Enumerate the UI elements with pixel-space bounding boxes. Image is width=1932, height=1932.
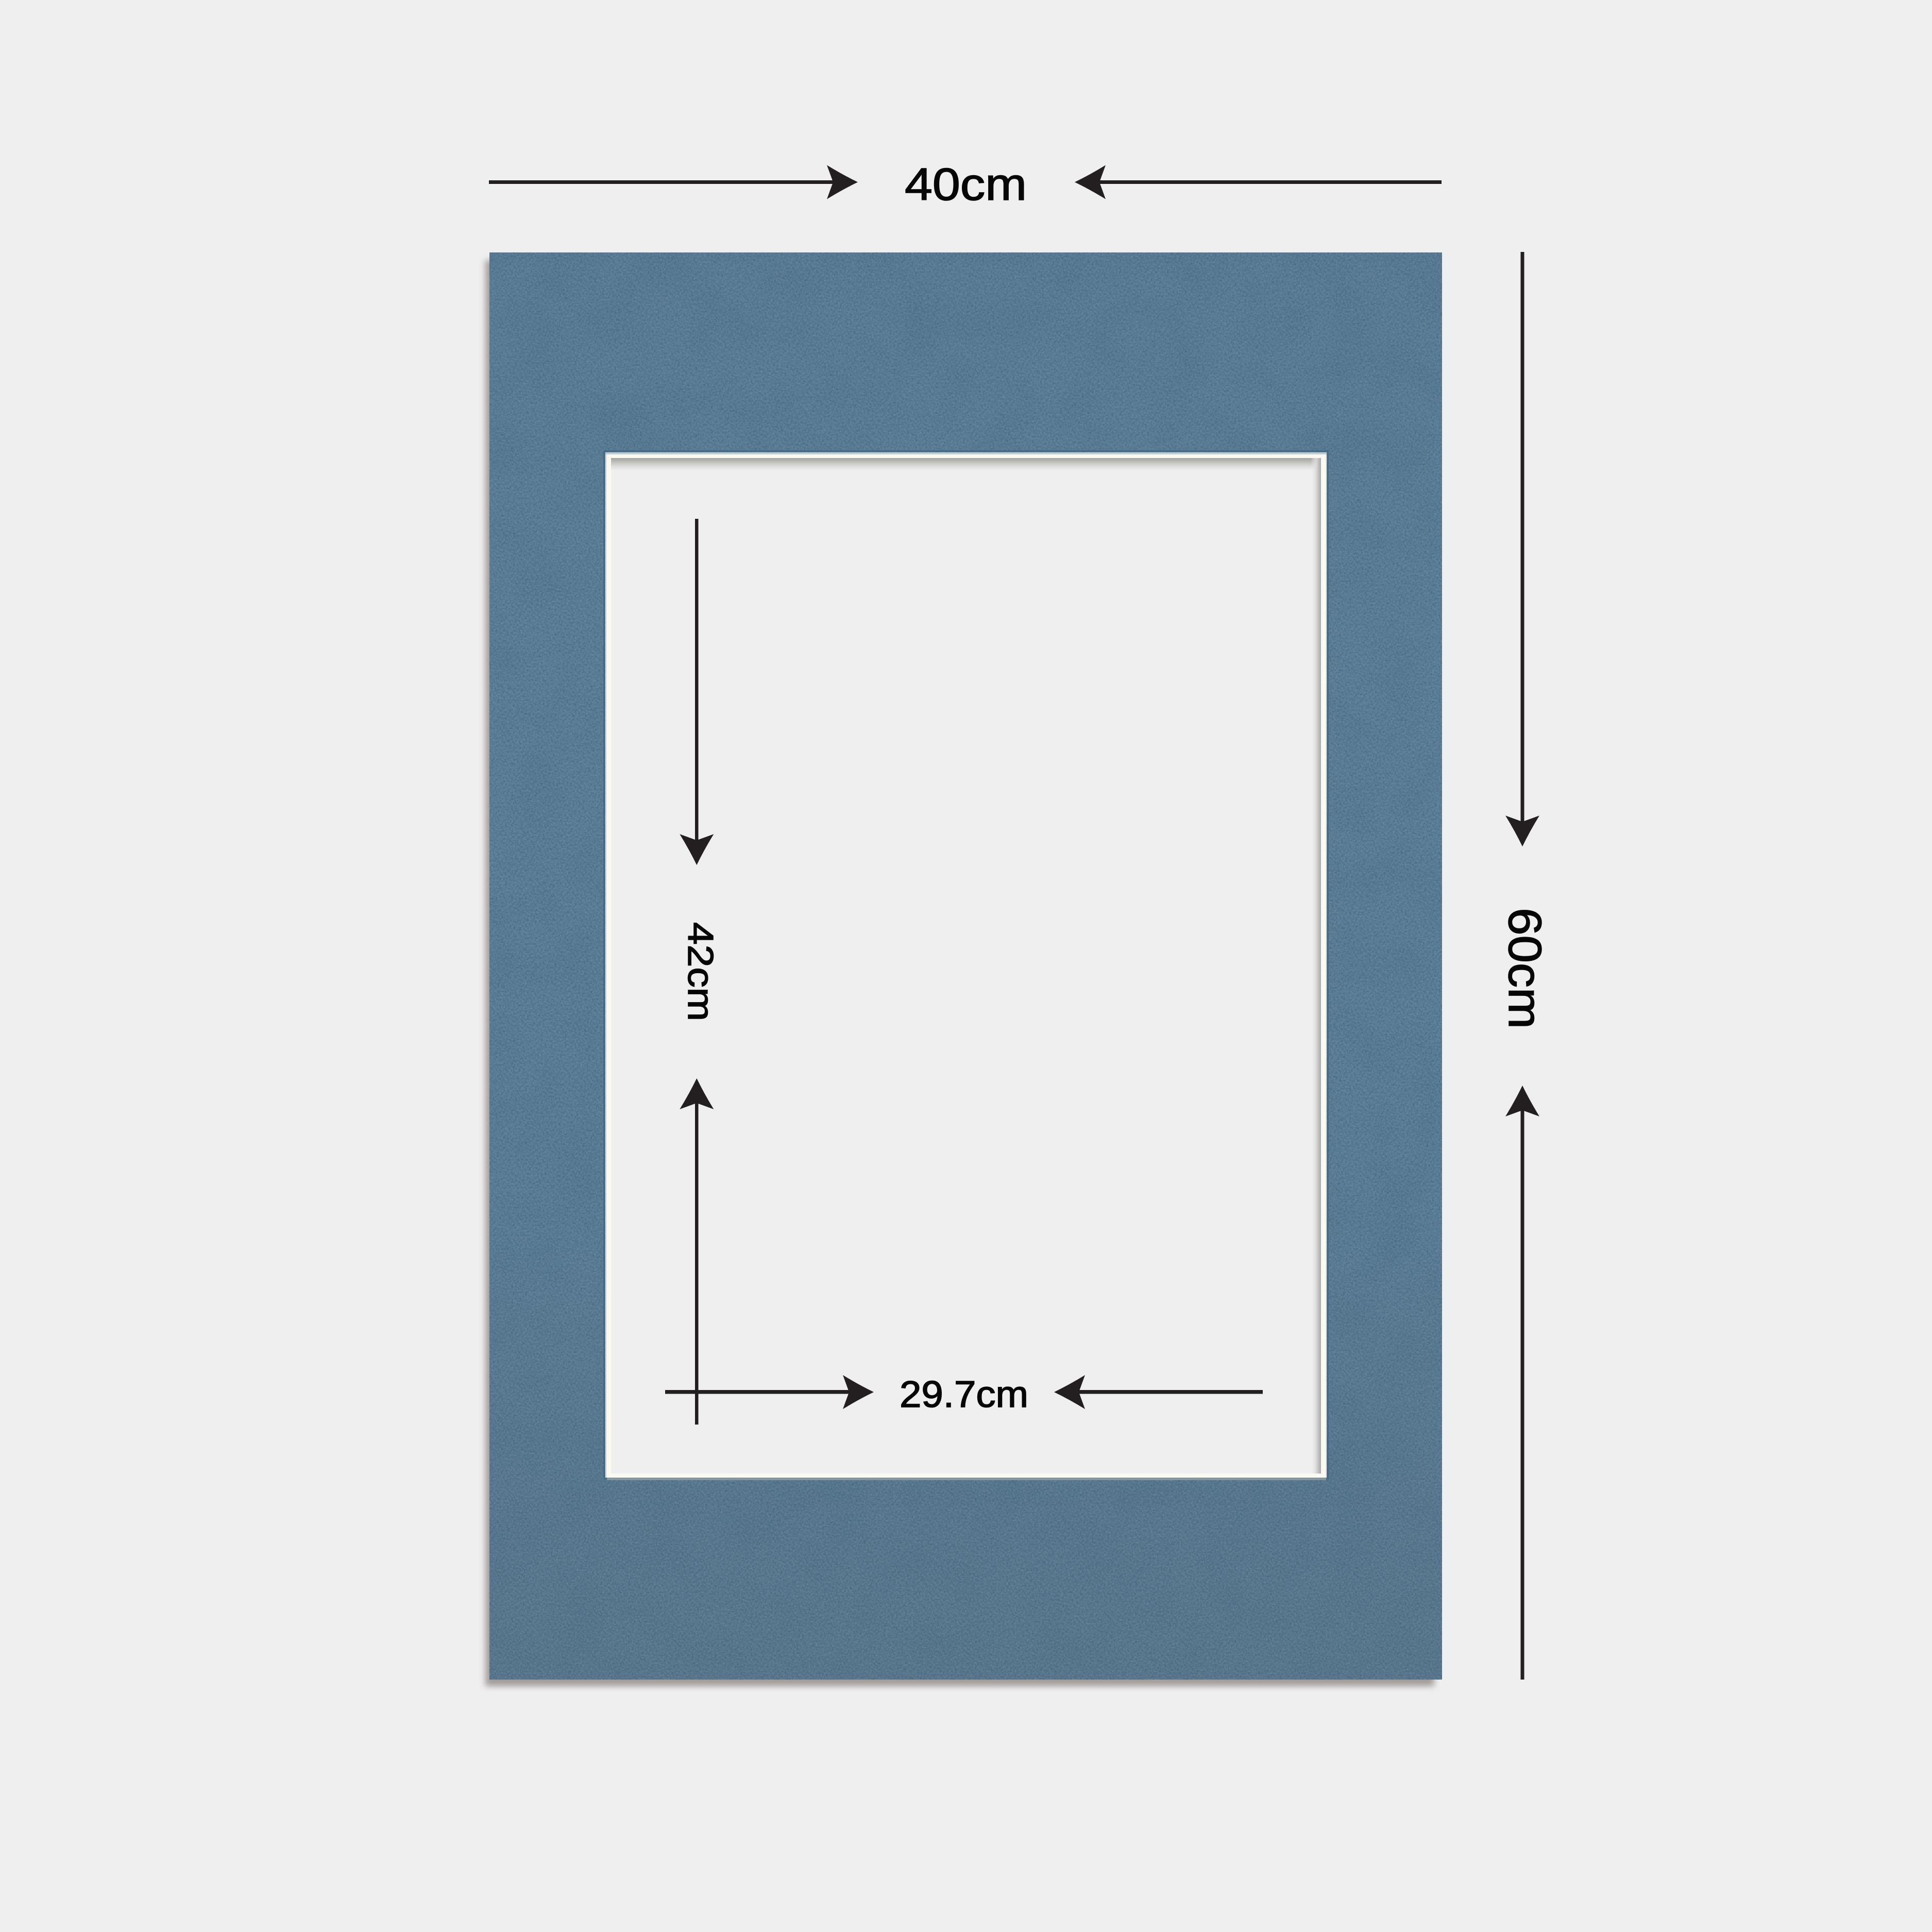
label: window width: 29.7cm [900, 1374, 1028, 1415]
mount board surface [489, 252, 1442, 1680]
right bevel outer edge [1326, 454, 1327, 1478]
label: outer height: 60cm [1499, 908, 1550, 1029]
top inner shadow [611, 458, 1321, 470]
arrow: window width right [1054, 1375, 1263, 1409]
panel: blue mount board [485, 252, 1442, 1686]
arrow: window height top [680, 519, 714, 865]
arrow: outer width right [1075, 165, 1442, 199]
arrow: window width left [665, 1375, 874, 1409]
label: window height: 42cm [681, 922, 721, 1021]
infographic canvas [481, 165, 1542, 1690]
panel: window opening with white bevel [604, 451, 1328, 1480]
arrow: outer height bottom [1505, 1086, 1539, 1680]
arrow: outer height top [1505, 252, 1539, 846]
bevel shadow below opening [607, 1477, 1326, 1480]
right inner shadow [1311, 458, 1321, 1473]
dark cut edge around opening [604, 451, 1328, 1479]
opening interior [611, 458, 1321, 1473]
mount drop shadow [485, 260, 1434, 1686]
arrow: outer width left [489, 165, 858, 199]
opening [605, 452, 1327, 1478]
label: outer width: 40cm [905, 159, 1027, 210]
arrow: window height bottom [680, 1078, 714, 1425]
top bevel outer edge [605, 452, 1327, 454]
left bevel outer edge [605, 454, 607, 1478]
